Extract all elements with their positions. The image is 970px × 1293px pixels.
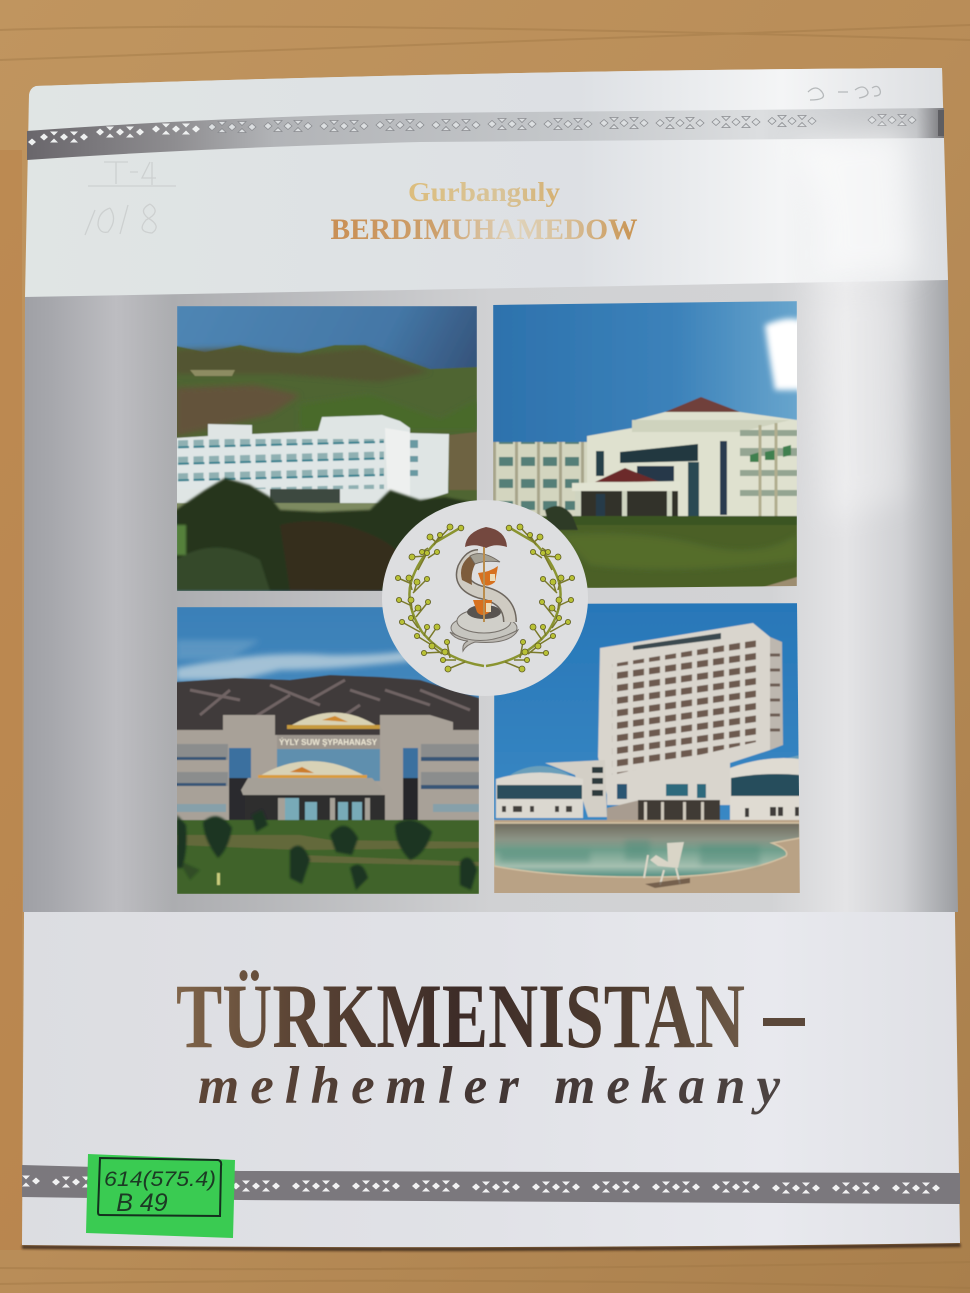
photo: Ýyly suw building with domes: ÝYLY SUW ŞYPAHANASY xyxy=(279,738,378,747)
icon: pool chair xyxy=(644,842,690,888)
green library label xyxy=(86,1154,235,1238)
silver photo band xyxy=(23,280,958,912)
wreath branch left xyxy=(395,524,484,672)
photo: white hospital with green windows xyxy=(493,301,812,588)
author name xyxy=(330,177,638,246)
icon: wreath xyxy=(395,524,575,672)
medical emblem medallion xyxy=(382,500,588,696)
handwritten library marks xyxy=(85,86,880,235)
author name: Gurbanguly xyxy=(408,177,561,207)
photo: Ýyly suw building with domes xyxy=(176,607,479,894)
photo: sanatorium below green hills xyxy=(176,306,477,591)
photo: high-rise hotel with pool xyxy=(494,603,800,894)
author name: BERDIMUHAMEDOW xyxy=(330,213,638,246)
main title: TÜRKMENISTAN xyxy=(176,965,745,1067)
green library label: 614(575.4) xyxy=(104,1168,216,1191)
top ornamental band xyxy=(0,108,944,160)
subtitle: melhemler mekany xyxy=(198,1057,780,1115)
green library label: B 49 xyxy=(116,1189,168,1217)
wreath branch right xyxy=(486,524,575,672)
glare on top panel xyxy=(790,130,915,280)
glare on silver band xyxy=(815,285,905,520)
top white panel xyxy=(25,68,948,297)
icon: serpent with bowl and tree xyxy=(450,527,518,651)
bottom ornamental band xyxy=(0,1165,960,1204)
